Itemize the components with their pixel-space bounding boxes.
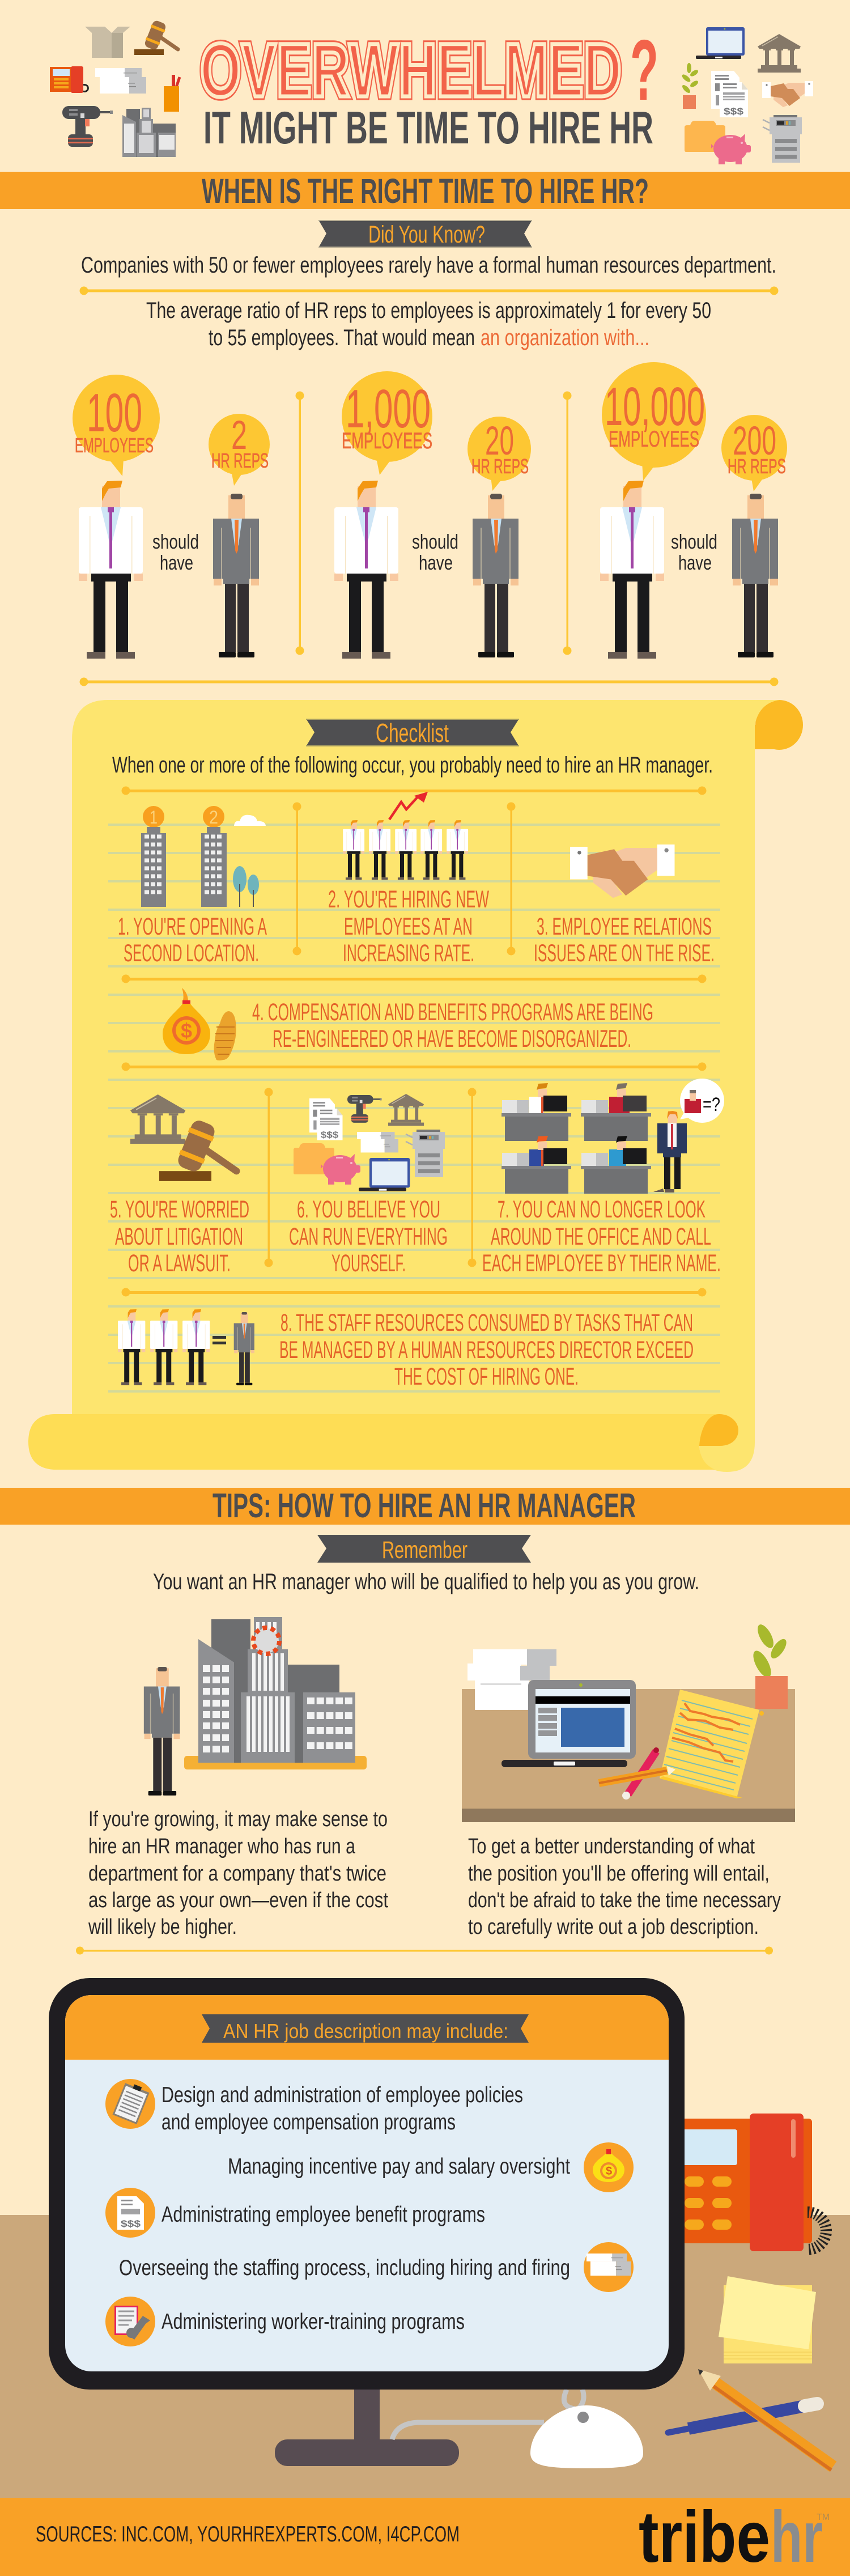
icon: notes and hammer xyxy=(105,2297,155,2346)
ribbon: checklist xyxy=(306,718,519,748)
divider xyxy=(121,1288,706,1297)
vertical dividers row one xyxy=(292,803,516,956)
divider xyxy=(121,975,706,983)
icon: money bag: $ xyxy=(606,2165,612,2178)
logo: tribehr: TM xyxy=(817,2513,830,2522)
text: if you're growing: hire an HR manager who has run a xyxy=(88,1835,356,1858)
icon: invoice: $$$ xyxy=(121,2218,141,2229)
divider xyxy=(121,1062,706,1071)
text: 6. YOU BELIEVE YOU xyxy=(297,1196,440,1223)
ribbon: remember: Remember xyxy=(382,1537,468,1564)
icon: handshake xyxy=(762,81,813,107)
icon: handshake xyxy=(570,844,674,898)
vertical dividers between ratio groups xyxy=(296,391,571,655)
title: overwhelmed xyxy=(200,22,658,118)
item 1: second location xyxy=(118,806,267,967)
illustration: pencil xyxy=(698,2369,833,2470)
text: ABOUT LITIGATION xyxy=(115,1223,243,1250)
text xyxy=(534,913,715,967)
text xyxy=(252,999,653,1053)
text: should have: have xyxy=(160,551,193,574)
text xyxy=(162,2083,523,2134)
bubble: 10,000 employees: 10,000 xyxy=(605,376,705,437)
header: right icon cluster xyxy=(681,27,813,164)
bubble: 100 employees xyxy=(73,375,160,476)
base platform xyxy=(184,1756,367,1769)
text: should have: have xyxy=(419,551,453,574)
text: 1. YOU'RE OPENING A xyxy=(118,913,267,940)
item 4: compensation and benefits xyxy=(163,988,653,1060)
text: you want an HR manager: You want an HR manager who will be qualified to help you as you grow. xyxy=(153,1569,699,1594)
text: average ratio: to 55 employees. That would mean xyxy=(209,325,475,350)
logo: tribehr: hr xyxy=(771,2497,823,2576)
bubble: 1,000 employees: 1,000 xyxy=(346,379,431,439)
bubble: 200 HR reps: 200 xyxy=(733,419,776,464)
icon: potted plant xyxy=(681,63,699,109)
text: Administrating employee benefit programs xyxy=(162,2202,485,2227)
scroll top roll xyxy=(755,700,803,750)
thought bubble: employee equals question xyxy=(680,1079,724,1123)
icon: copier xyxy=(763,115,802,163)
man: HR rep xyxy=(213,494,259,657)
bubble: 20 HR reps xyxy=(468,417,531,491)
sources: SOURCES: INC.COM, YOURHREXPERTS.COM, I4CP.COM xyxy=(36,2522,460,2547)
icon: pencil cup xyxy=(164,75,180,112)
text: CAN RUN EVERYTHING xyxy=(289,1223,448,1250)
icon: row of employees with rising arrow xyxy=(343,792,468,880)
icon: clipboard xyxy=(105,2079,155,2129)
text: OR A LAWSUIT. xyxy=(128,1250,231,1277)
bezel xyxy=(49,1978,685,2390)
text xyxy=(110,1196,249,1277)
desk red jacket worker xyxy=(581,1083,651,1141)
title: overwhelmed: OVERWHELMED xyxy=(200,28,622,113)
text: should have xyxy=(152,530,199,574)
divider xyxy=(76,1946,773,1954)
paper stack xyxy=(468,1649,556,1710)
illustration: sticky notes xyxy=(719,2276,816,2363)
icon: papers xyxy=(584,2242,634,2292)
group: 100 employees, 2 HR reps xyxy=(73,375,270,659)
section band: when is the right time: WHEN IS THE RIGHT TIME TO HIRE HR? xyxy=(202,172,649,210)
text: to get a better understanding xyxy=(468,1835,781,1939)
man: employee xyxy=(334,481,398,659)
text: 3. EMPLOYEE RELATIONS xyxy=(537,913,712,940)
group: 10,000 employees, 200 HR reps xyxy=(600,362,787,659)
text: to get a better understanding: the position you'll be offering will entail, xyxy=(468,1862,770,1886)
icon: open box xyxy=(85,27,130,58)
desk white shirt worker xyxy=(502,1083,571,1141)
icon: invoice xyxy=(105,2188,155,2238)
text: to get a better understanding: don't be afraid to take the time necessary xyxy=(468,1888,781,1912)
screen body xyxy=(65,1995,669,2371)
item 5: litigation xyxy=(110,1094,249,1277)
tablet xyxy=(502,1680,636,1767)
illustration: computer mouse xyxy=(530,2405,643,2468)
icon: money bag and coins: $ xyxy=(181,1019,192,1042)
text xyxy=(289,1196,448,1277)
text: Overseeing the staffing process, including hiring and firing xyxy=(119,2256,570,2280)
text: should have: should xyxy=(671,530,717,553)
icon: bank and gavel xyxy=(130,1094,236,1181)
desk blue jacket worker xyxy=(502,1136,571,1194)
man: HR rep xyxy=(732,494,778,657)
group: 1,000 employees, 20 HR reps xyxy=(334,371,531,659)
bubble: 100 employees: EMPLOYEES xyxy=(75,434,154,457)
divider xyxy=(79,287,779,295)
desk surface xyxy=(0,2215,850,2498)
plant xyxy=(750,1622,789,1709)
logo: tribehr: tribe xyxy=(639,2497,770,2576)
ribbon: checklist: Checklist xyxy=(376,718,449,748)
scroll bottom roll xyxy=(28,1414,738,1470)
icon: city buildings xyxy=(122,108,176,157)
illustration: desk phone xyxy=(674,2114,826,2251)
bubble: 20 HR reps: HR REPS xyxy=(471,455,529,478)
bubble: 2 HR reps: 2 xyxy=(231,413,247,458)
man xyxy=(144,1667,180,1796)
item 2: hiring new employees xyxy=(328,792,489,967)
bubble: 10,000 employees: EMPLOYEES xyxy=(609,427,699,452)
bubble: 10,000 employees xyxy=(602,362,706,481)
mouse cable xyxy=(392,2390,584,2439)
screen header xyxy=(65,1995,669,2060)
text: EMPLOYEES AT AN xyxy=(344,913,473,940)
stand xyxy=(275,2386,459,2466)
icon: folder xyxy=(685,121,725,152)
text: should have: should xyxy=(412,530,458,553)
icon: gavel xyxy=(134,19,178,55)
text: if you're growing: will likely be higher. xyxy=(88,1915,237,1939)
job description sheet xyxy=(660,1690,764,1798)
list item: worker training xyxy=(105,2297,465,2346)
illustration: man and company buildings xyxy=(144,1617,367,1796)
marker xyxy=(622,1747,659,1800)
icon: two buildings with location pins: 2 xyxy=(209,807,218,827)
text: to get a better understanding: to carefully write out a job description. xyxy=(468,1915,759,1939)
icon: desk phone xyxy=(50,66,88,93)
pencil xyxy=(599,1766,675,1783)
scroll sheet xyxy=(72,700,780,1472)
bubble: 1,000 employees xyxy=(342,371,432,475)
text: should have: should xyxy=(152,530,199,553)
desk cyan shirt worker xyxy=(581,1136,651,1194)
buildings xyxy=(198,1617,355,1763)
section band: tips: TIPS: HOW TO HIRE AN HR MANAGER xyxy=(212,1487,636,1525)
bubble: 2 HR reps xyxy=(209,413,270,486)
illustration: pen xyxy=(668,2404,817,2433)
item 7: office full of employees xyxy=(482,1079,724,1277)
thought bubble: employee equals question: =? xyxy=(703,1094,720,1115)
icon: three employees equal one director xyxy=(118,1309,254,1385)
list item: incentive pay xyxy=(228,2142,634,2192)
icon: money bag and coins xyxy=(163,988,236,1060)
footer band xyxy=(0,2497,850,2576)
text: if you're growing: If you're growing, it may make sense to xyxy=(88,1807,388,1831)
list item: benefit programs xyxy=(105,2188,485,2238)
divider xyxy=(79,678,779,686)
panel: checklist scroll xyxy=(28,700,803,1472)
text: Managing incentive pay and salary oversight xyxy=(228,2154,570,2179)
icon: office items cluster xyxy=(294,1094,445,1191)
bubble: 1,000 employees: EMPLOYEES xyxy=(342,428,432,453)
text: should have: have xyxy=(678,551,712,574)
icon: two buildings with location pins xyxy=(141,806,266,907)
illustration: monitor xyxy=(49,1978,685,2466)
text: 2. YOU'RE HIRING NEW xyxy=(328,886,489,913)
text: if you're growing xyxy=(88,1807,388,1939)
illustration: desk with tablet and job description xyxy=(462,1622,795,1822)
text: YOURSELF. xyxy=(332,1250,406,1277)
text xyxy=(118,913,267,967)
icon: stack of papers xyxy=(95,68,146,94)
man: employee xyxy=(600,481,664,659)
icon: bank xyxy=(758,34,801,73)
text: Administering worker-training programs xyxy=(162,2310,465,2334)
bubble: 100 employees: 100 xyxy=(87,383,142,443)
ribbon: remember xyxy=(317,1535,531,1564)
manager figure xyxy=(653,1111,689,1192)
list item: policies xyxy=(105,2079,523,2134)
text: if you're growing: as large as your own—even if the cost xyxy=(88,1888,388,1912)
text: to get a better understanding: To get a better understanding of what xyxy=(468,1835,755,1858)
text: Design and administration of employee policies xyxy=(162,2083,523,2107)
icon: piggy bank xyxy=(711,134,751,164)
text: and employee compensation programs xyxy=(162,2110,456,2134)
text: 5. YOU'RE WORRIED xyxy=(110,1196,249,1223)
text: average ratio xyxy=(146,298,711,350)
item 3: employee relations xyxy=(534,844,715,967)
item 6: run everything yourself xyxy=(289,1094,448,1277)
item 8: staff resources xyxy=(118,1309,694,1390)
header: left icon cluster xyxy=(50,19,180,157)
text xyxy=(482,1196,721,1277)
text: average ratio: an organization with... xyxy=(481,325,649,350)
icon: two buildings with location pins: 1 xyxy=(150,807,158,827)
text: should have xyxy=(671,530,717,574)
icon: invoice xyxy=(711,71,748,117)
icon: laptop xyxy=(696,27,745,59)
man: HR rep xyxy=(473,494,518,657)
text: THE COST OF HIRING ONE. xyxy=(394,1363,579,1390)
bubble: 2 HR reps: HR REPS xyxy=(211,449,269,472)
bubble: 200 HR reps xyxy=(721,415,787,491)
bubble: 200 HR reps: HR REPS xyxy=(728,455,786,478)
list item: staffing process xyxy=(119,2242,634,2292)
man: employee xyxy=(79,481,143,659)
text: if you're growing: department for a company that's twice xyxy=(88,1862,386,1886)
rule lines xyxy=(108,825,720,1391)
icon: office desks xyxy=(502,1079,724,1194)
icon: money bag xyxy=(584,2142,634,2192)
vertical dividers row three xyxy=(264,1088,476,1267)
title: overwhelmed: ? xyxy=(630,22,658,118)
text: ISSUES ARE ON THE RISE. xyxy=(534,940,715,967)
ribbon: did you know: Did You Know? xyxy=(368,221,485,248)
ribbon: job description: AN HR job description may include: xyxy=(223,2019,508,2043)
divider xyxy=(121,787,706,795)
text: INCREASING RATE. xyxy=(343,940,474,967)
title: overwhelmed: OVERWHELMED xyxy=(200,28,622,113)
text: SECOND LOCATION. xyxy=(124,940,259,967)
bubble: 20 HR reps: 20 xyxy=(485,419,514,464)
text xyxy=(279,1309,694,1390)
desk xyxy=(462,1689,795,1822)
text: should have xyxy=(412,530,458,574)
text xyxy=(328,886,489,967)
icon: power drill xyxy=(62,106,113,147)
